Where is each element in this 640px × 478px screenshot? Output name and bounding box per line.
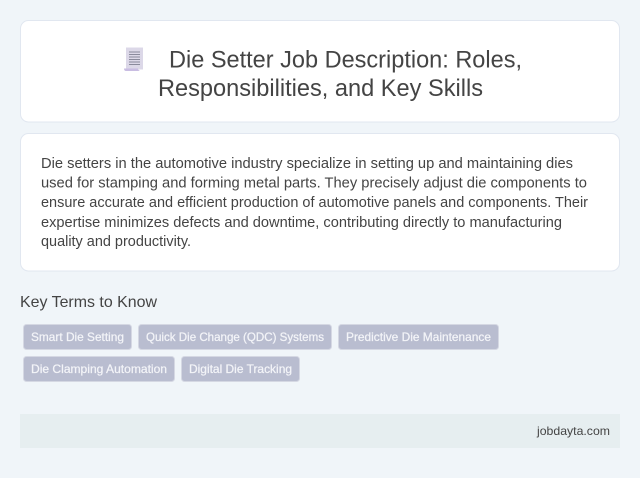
footer [20, 414, 620, 448]
title: Responsibilities, and Key Skills [158, 75, 483, 102]
icon: document scroll [124, 48, 143, 71]
description text: used for stamping and forming metal parts. They precisely adjust die components to [41, 176, 587, 192]
tag: predictive die maintenance: Predictive Die Maintenance [346, 330, 491, 344]
tag: digital die tracking: Digital Die Tracking [189, 362, 292, 376]
tag: predictive die maintenance [338, 324, 498, 350]
tag: quick die change [138, 324, 332, 350]
footer: jobdayta.com [536, 424, 610, 438]
tag: die clamping automation: Die Clamping Automation [31, 362, 167, 376]
tag: smart die setting: Smart Die Setting [31, 330, 124, 344]
description text: ensure accurate and efficient production of automotive panels and components. Their [41, 195, 588, 211]
panel: title card [20, 20, 620, 122]
panel: description [20, 134, 620, 271]
heading: key terms: Key Terms to Know [20, 294, 157, 311]
title [158, 46, 522, 102]
tags [24, 324, 498, 382]
title: Die Setter Job Description: Roles, [169, 46, 522, 74]
description text [41, 156, 588, 250]
tag: smart die setting [24, 324, 132, 350]
description text: expertise minimizes defects and downtime, contributing directly to manufacturing [41, 215, 562, 231]
tag: die clamping automation [24, 356, 174, 382]
description text: quality and productivity. [41, 234, 191, 250]
description text: Die setters in the automotive industry specialize in setting up and maintaining dies [41, 156, 573, 172]
tag: quick die change: Quick Die Change (QDC) Systems [146, 330, 324, 344]
tag: digital die tracking [182, 356, 300, 382]
